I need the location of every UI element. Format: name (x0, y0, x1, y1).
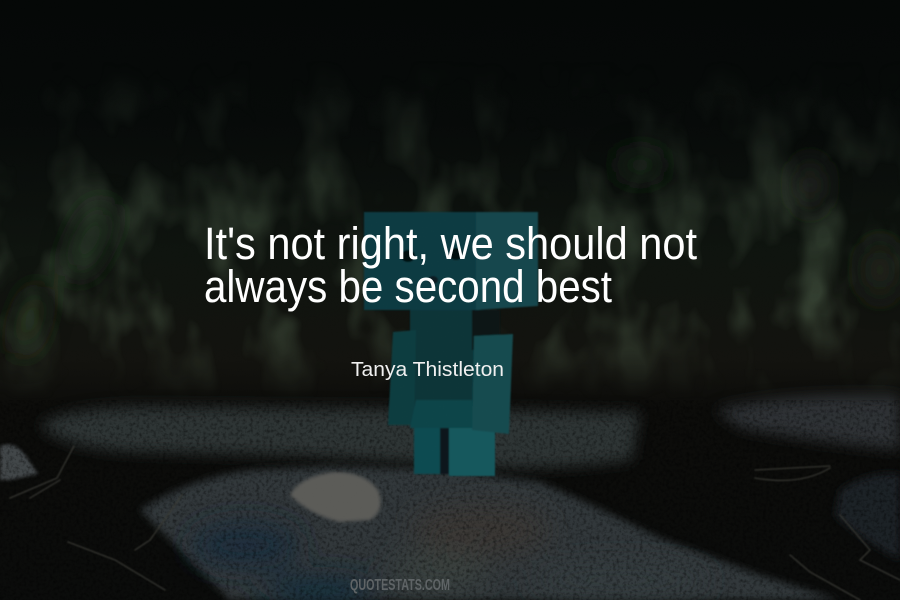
robot legs (414, 424, 495, 476)
rock colour variation (186, 518, 680, 600)
shell on the rock (290, 472, 381, 522)
twigs (10, 446, 900, 600)
site watermark: QUOTESTATS.COM (350, 577, 450, 594)
foreground rock (140, 466, 900, 600)
blurred foliage (0, 98, 884, 384)
shell at left edge (0, 444, 38, 480)
quote text (204, 218, 697, 312)
author name: Tanya Thistleton (351, 359, 504, 381)
robot figure (364, 212, 538, 476)
quote text: always be second best (204, 261, 612, 312)
robot body (388, 305, 513, 434)
robot head (364, 212, 538, 310)
quote text: It's not right, we should not (204, 218, 697, 269)
distant stone slabs (40, 395, 900, 468)
grain on the ground (0, 400, 900, 600)
